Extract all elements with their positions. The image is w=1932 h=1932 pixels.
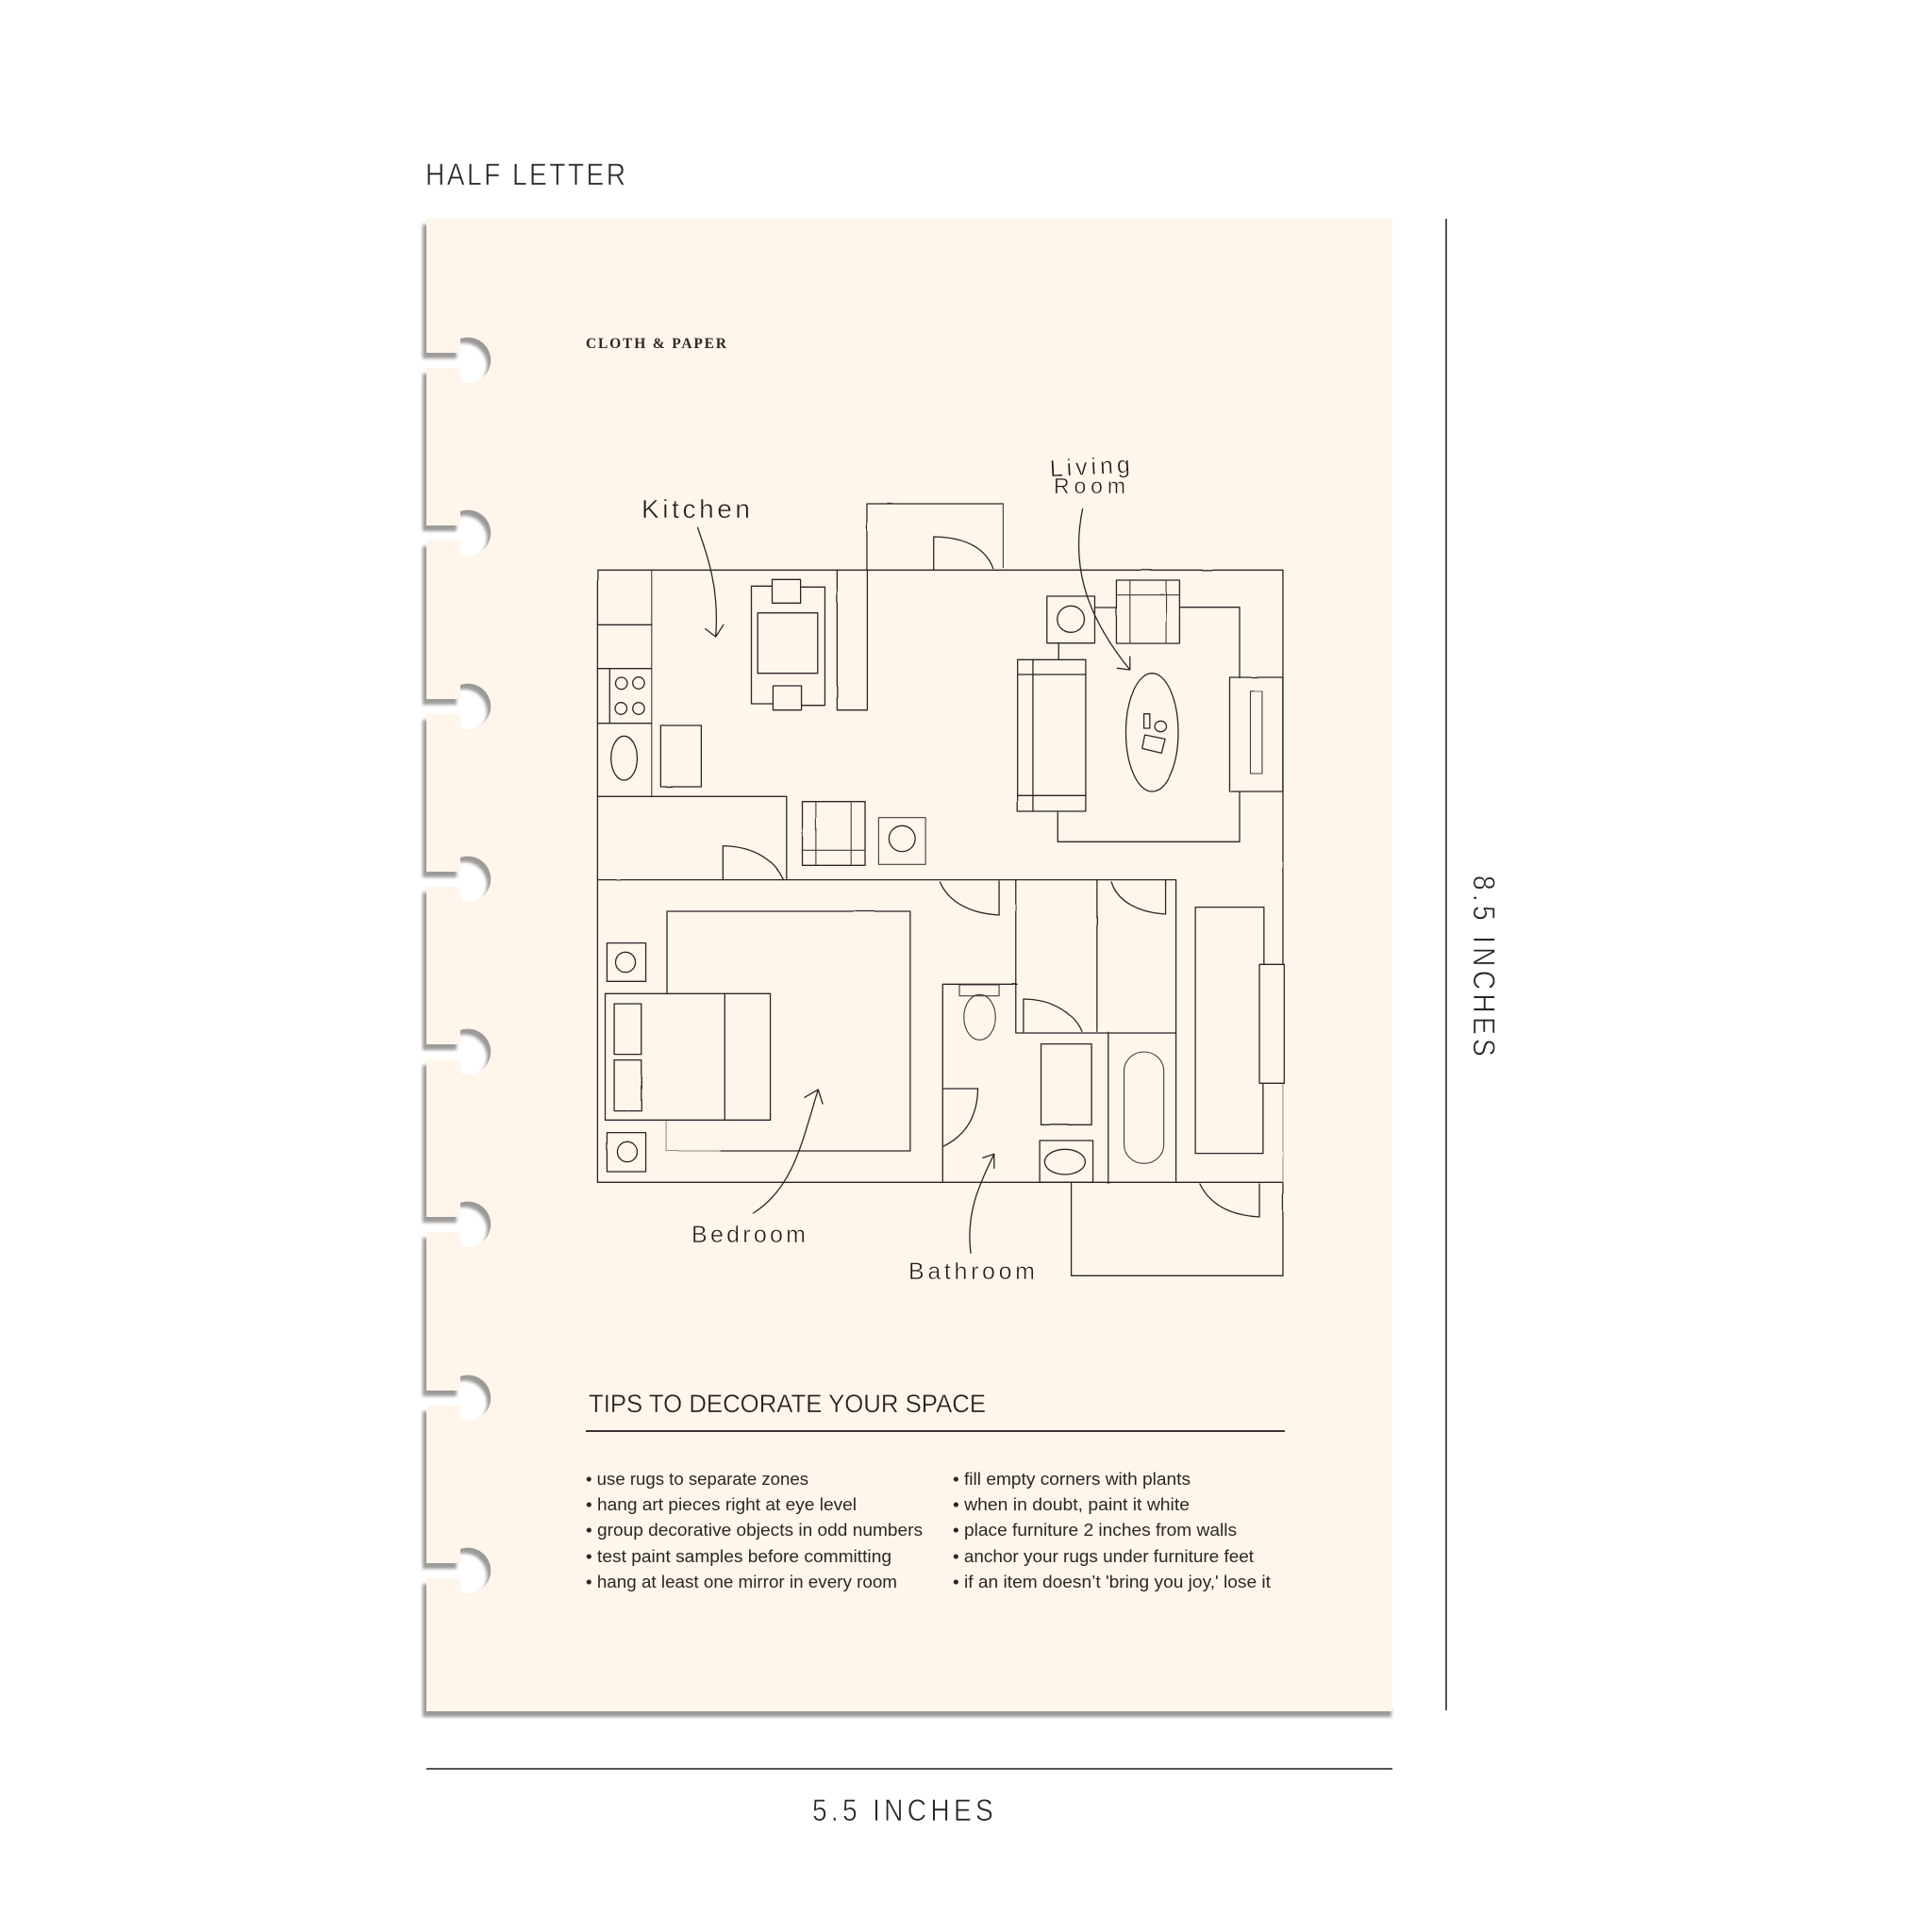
tips list: left column: • hang art pieces right at eye level <box>586 1495 857 1514</box>
dimension: width label: 5.5 INCHES <box>812 1794 993 1827</box>
label: bathroom: Bathroom <box>908 1258 1035 1285</box>
label: living room: Room <box>1054 474 1125 498</box>
brand name: CLOTH & PAPER <box>586 336 727 352</box>
tips list: left column: • use rugs to separate zones <box>586 1470 808 1489</box>
living room armchair <box>1116 580 1179 643</box>
oval coffee table <box>1125 674 1178 791</box>
tips list: right column <box>953 1470 1271 1591</box>
heading: half letter: HALF LETTER <box>425 158 625 192</box>
label: living room <box>1049 452 1130 498</box>
media console <box>1229 677 1283 791</box>
tips list: left column: • test paint samples before committing <box>586 1547 891 1566</box>
second armchair <box>803 802 865 865</box>
label: bedroom: Bedroom <box>691 1222 806 1248</box>
label: kitchen: Kitchen <box>641 494 750 524</box>
bed and pillows <box>606 993 771 1120</box>
second side table <box>878 818 925 864</box>
page shadow <box>423 225 1391 1717</box>
arrow: bathroom <box>970 1154 994 1253</box>
hall closet door <box>723 846 783 880</box>
dining table and chairs <box>751 579 824 710</box>
living room rug <box>1058 608 1240 841</box>
page sheet <box>426 219 1392 1711</box>
outer walls <box>597 570 1283 1182</box>
tips list: left column: • group decorative objects in odd numbers <box>586 1521 923 1540</box>
sofa <box>1018 659 1086 811</box>
tips list: right column: • anchor your rugs under furniture feet <box>953 1547 1254 1566</box>
patio <box>1072 1183 1283 1275</box>
tips list: right column: • when in doubt, paint it white <box>953 1495 1190 1514</box>
tips list: left column <box>586 1470 923 1591</box>
floor plan drawing <box>597 504 1284 1275</box>
tips list: right column: • if an item doesn’t 'bring you joy,' lose it <box>953 1573 1271 1591</box>
bathroom walls and toilet <box>942 984 1017 1182</box>
interior doors <box>940 880 1166 1032</box>
panel: planner page with disc-bound notches <box>423 219 1392 1717</box>
tips heading: TIPS TO DECORATE YOUR SPACE <box>589 1390 986 1418</box>
dimension: height line <box>1445 219 1447 1710</box>
arrow: bedroom <box>753 1090 823 1213</box>
bedroom rug <box>666 911 910 1151</box>
dimension: width line <box>426 1768 1392 1770</box>
tips list: right column: • fill empty corners with plants <box>953 1470 1191 1489</box>
closet and dresser <box>1195 908 1284 1154</box>
living room side table <box>1047 596 1094 643</box>
entry closet and door <box>867 504 1003 570</box>
arrow: kitchen <box>698 527 724 637</box>
vanity, sink and bathtub <box>1040 1032 1164 1182</box>
partition wall <box>837 570 867 710</box>
tips list: right column: • place furniture 2 inches from walls <box>953 1521 1237 1540</box>
kitchen cabinets and appliances <box>597 570 787 880</box>
dimension: height label: 8.5 INCHES <box>1467 875 1500 1057</box>
nightstands <box>607 943 646 1172</box>
tips list: left column: • hang at least one mirror in every room <box>586 1573 897 1591</box>
interior walls <box>597 880 1176 1182</box>
label: living room: Living <box>1049 452 1130 482</box>
arrow: living room <box>1078 508 1130 670</box>
